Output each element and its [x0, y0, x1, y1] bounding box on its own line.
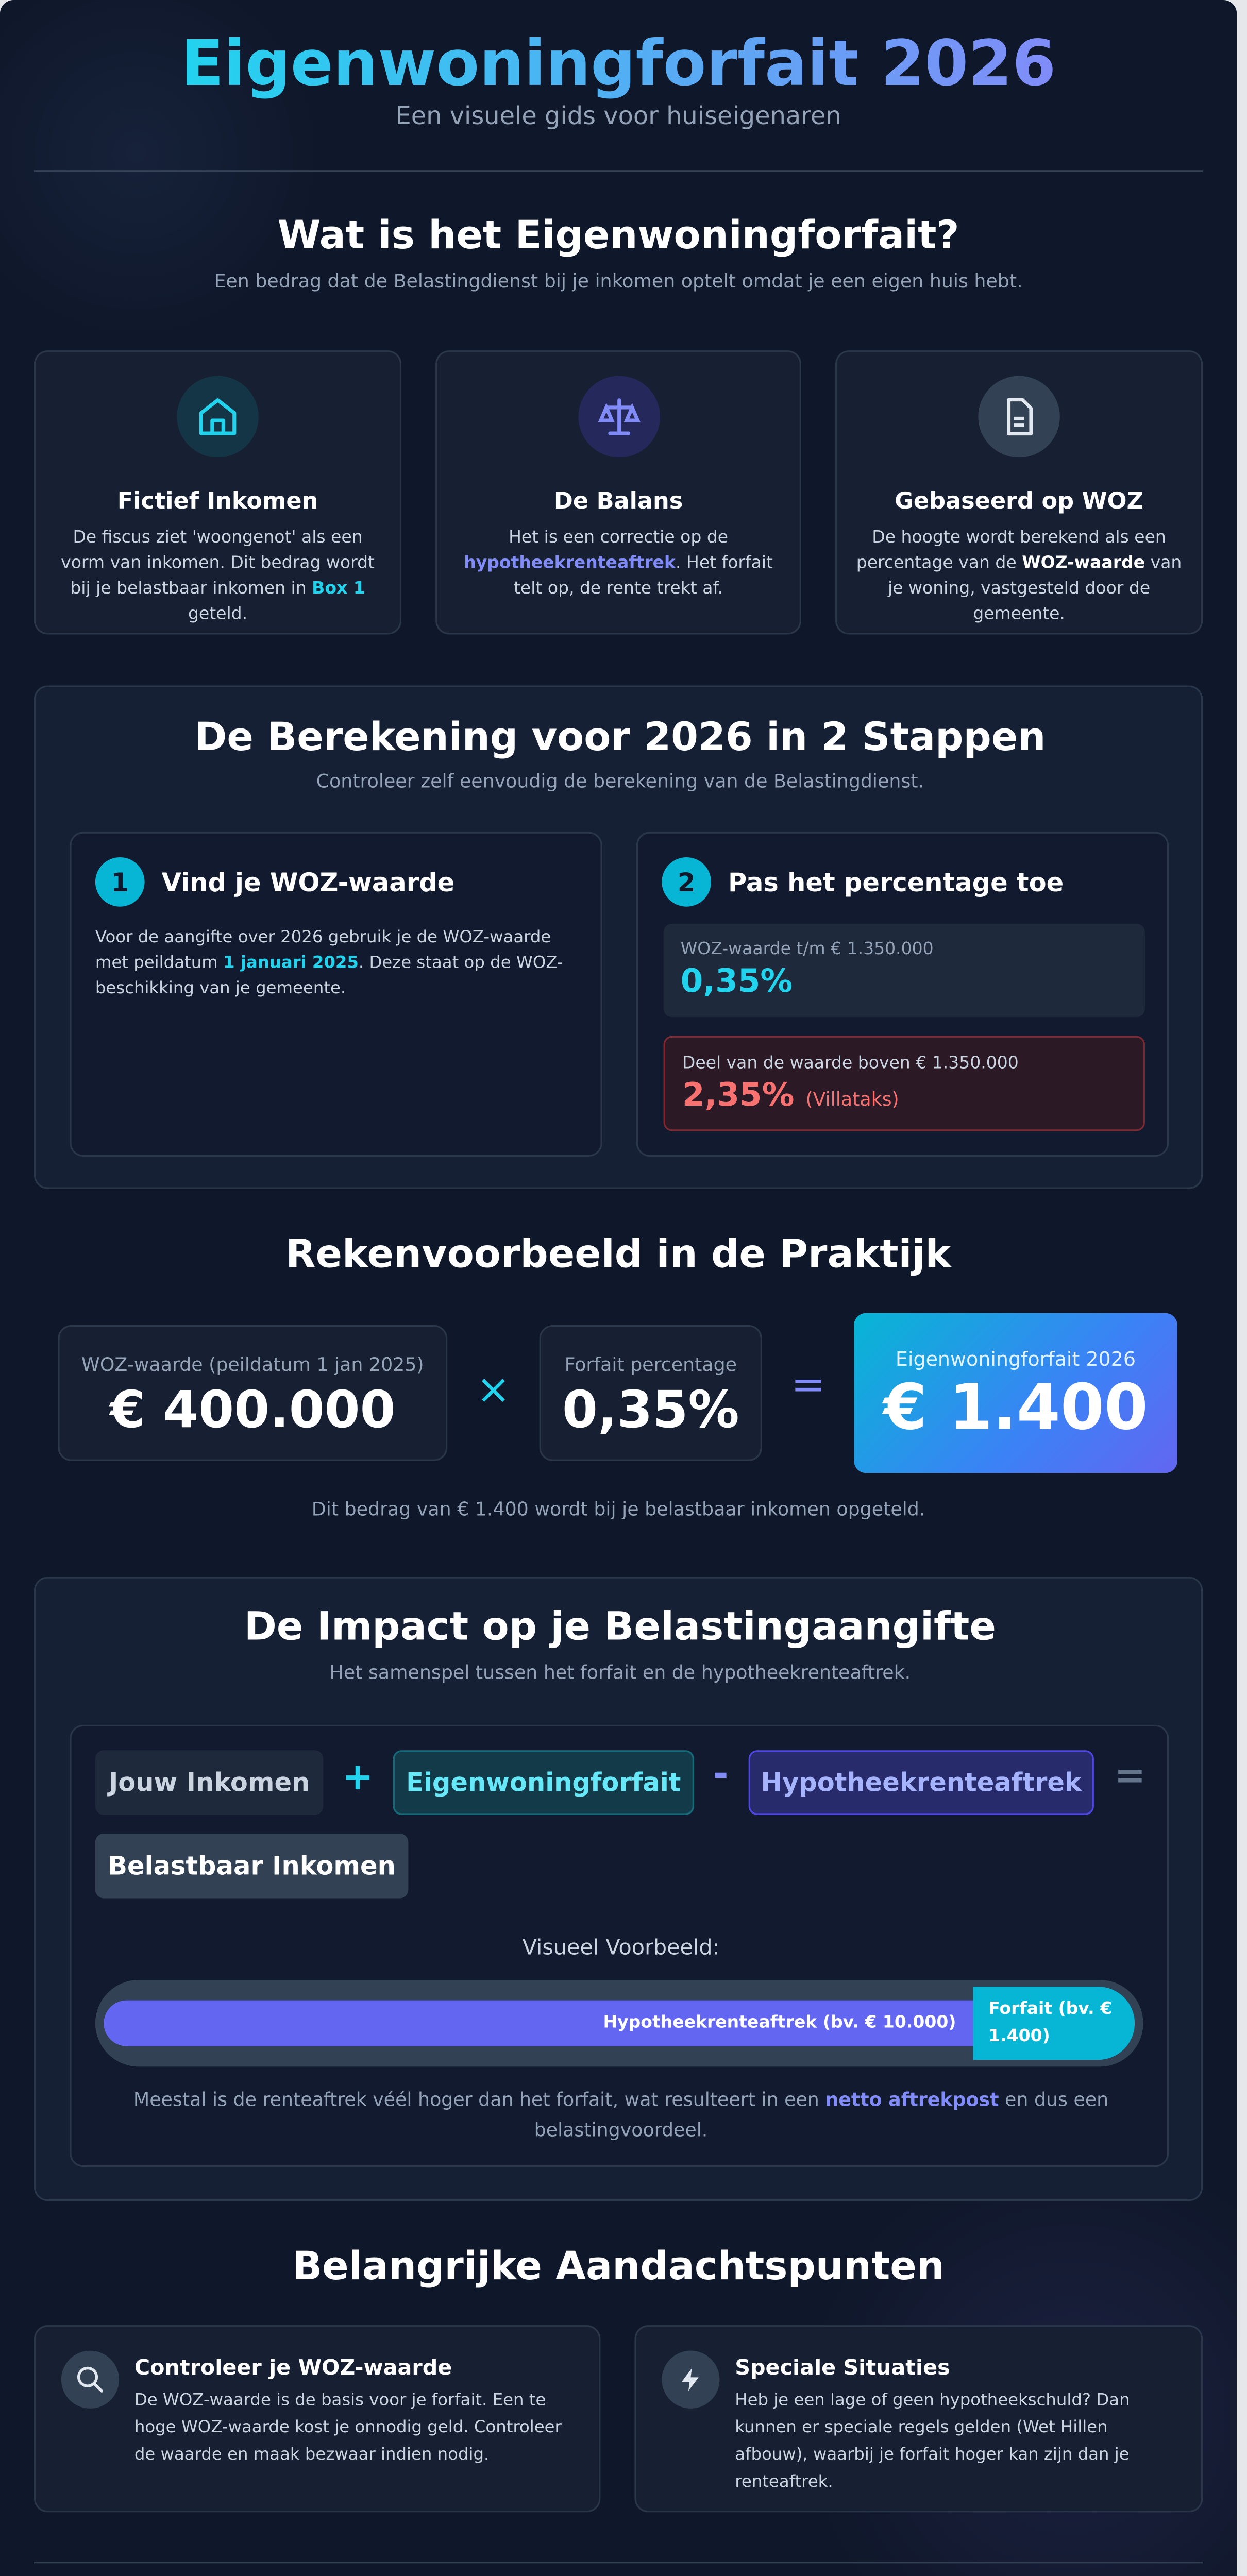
- step 1 header: [95, 857, 454, 907]
- pill: hypotheek: [749, 1750, 1094, 1815]
- result box: € 1.400: [883, 1371, 1148, 1444]
- bar: hypotheek: Hypotheekrenteaftrek (bv. € 10.000): [603, 2014, 956, 2032]
- heading: De Berekening voor 2026 in 2 Stappen: [194, 716, 1046, 760]
- result box: Eigenwoningforfait 2026: [896, 1347, 1136, 1371]
- step 2 header: 2: [678, 867, 695, 897]
- step 1 header: 1: [111, 867, 129, 897]
- tip: speciale situaties: Speciale Situaties: [735, 2354, 950, 2380]
- panel: fictief inkomen: [34, 350, 401, 634]
- caption: Dit bedrag van € 1.400 wordt bij je belastbaar inkomen opgeteld.: [312, 1499, 925, 1521]
- panel: woz: Gebaseerd op WOZ: [895, 488, 1143, 515]
- tip: woz: De WOZ-waarde is de basis voor je forfait. Een te hoge WOZ-waarde kost je onnodig geld. Controleer de waarde en maak bezwaar indien nodig.: [134, 2392, 562, 2465]
- bar: hypotheek: [104, 2001, 973, 2046]
- step 1 header: Vind je WOZ-waarde: [162, 867, 454, 897]
- panel: berekening: [34, 686, 1203, 1189]
- panel: woz: De hoogte wordt berekend als een percentage van de WOZ-waarde van je woning, vastgesteld door de gemeente.: [856, 529, 1182, 624]
- equals: =: [1114, 1755, 1145, 1798]
- box: percentage: 0,35%: [562, 1381, 739, 1440]
- tip: speciale situaties: Heb je een lage of geen hypotheekschuld? Dan kunnen er speciale regels gelden (Wet Hillen afbouw), waarbij je forfait hoger kan zijn dan je renteaftrek.: [735, 2392, 1130, 2492]
- box: percentage: [540, 1325, 762, 1461]
- step 1: [70, 832, 602, 1157]
- tip: speciale situaties: [634, 2325, 1203, 2512]
- pill: belastbaar: Belastbaar Inkomen: [108, 1851, 396, 1881]
- minus: -: [713, 1754, 729, 1796]
- icon: search: [61, 2351, 119, 2409]
- caption: Meestal is de renteaftrek véél hoger dan het forfait, wat resulteert in een netto aftrekpost en dus een belastingvoordeel.: [133, 2089, 1108, 2142]
- operator x: ×: [476, 1366, 511, 1414]
- plus: +: [342, 1757, 373, 1800]
- panel: de balans: Het is een correctie op de hypotheekrenteaftrek. Het forfait telt op, de rente trekt af.: [464, 529, 773, 599]
- subheading: Het samenspel tussen het forfait en de hypotheekrenteaftrek.: [330, 1662, 911, 1684]
- rate box normal: 0,35%: [681, 963, 793, 1000]
- rate box villataks: Deel van de waarde boven € 1.350.000: [682, 1055, 1019, 1073]
- rate box villataks: [664, 1036, 1145, 1131]
- box: woz: [58, 1325, 447, 1461]
- box: woz: € 400.000: [110, 1381, 396, 1440]
- rate box normal: WOZ-waarde t/m € 1.350.000: [681, 941, 934, 959]
- panel: woz: [835, 350, 1203, 634]
- subheading: Controleer zelf eenvoudig de berekening van de Belastingdienst.: [316, 771, 924, 792]
- formula box: [70, 1725, 1169, 2167]
- pill: jouw inkomen: Jouw Inkomen: [109, 1767, 310, 1798]
- step 1 text: Voor de aangifte over 2026 gebruik je de WOZ-waarde met peildatum 1 januari 2025. Deze staat op de WOZ-​beschikking van je gemeente.: [95, 929, 563, 998]
- rate box villataks: 2,35% (Villataks): [682, 1077, 899, 1114]
- bar chart: [95, 1980, 1143, 2066]
- subtitle: Een visuele gids voor huiseigenaren: [395, 104, 841, 131]
- step 2 header: [662, 857, 1064, 907]
- heading: wat is: Wat is het Eigenwoningforfait?: [278, 214, 959, 259]
- pill: jouw inkomen: [95, 1750, 323, 1815]
- panel: fictief inkomen: De fiscus ziet 'woongenot' als een vorm van inkomen. Dit bedrag wordt bij je belastbaar inkomen in Box 1 geteld.: [61, 529, 375, 624]
- panel: impact: [34, 1577, 1203, 2201]
- icon: document: [978, 376, 1060, 457]
- panel: de balans: De Balans: [554, 488, 683, 515]
- label visueel: Visueel Voorbeeld:: [523, 1934, 719, 1959]
- pill: forfait: [393, 1750, 694, 1815]
- panel: de balans: [435, 350, 801, 634]
- box: percentage: Forfait percentage: [565, 1354, 737, 1376]
- heading: De Impact op je Belastingaangifte: [244, 1606, 996, 1650]
- bar: forfait: Forfait (bv. €: [988, 2001, 1112, 2019]
- step 2: [636, 832, 1169, 1157]
- heading: aandachtspunten: Belangrijke Aandachtspunten: [292, 2245, 945, 2290]
- bar: forfait: 1.400): [988, 2027, 1050, 2046]
- step 2 header: Pas het percentage toe: [728, 867, 1064, 897]
- box: woz: WOZ-waarde (peildatum 1 jan 2025): [81, 1354, 424, 1376]
- title: Eigenwoningforfait 2026: [181, 27, 1056, 100]
- bar: forfait: [973, 1987, 1135, 2060]
- result box: [854, 1313, 1177, 1473]
- pill: forfait: Eigenwoningforfait: [406, 1767, 681, 1798]
- panel: fictief inkomen: Fictief Inkomen: [117, 488, 318, 515]
- pill: belastbaar: [95, 1834, 408, 1898]
- pill: hypotheek: Hypotheekrenteaftrek: [761, 1767, 1082, 1798]
- heading: rekenvoorbeeld: Rekenvoorbeeld in de Praktijk: [285, 1233, 951, 1277]
- icon: lightning: [662, 2351, 720, 2409]
- operator =: =: [791, 1361, 825, 1409]
- subheading: Een bedrag dat de Belastingdienst bij je inkomen optelt omdat je een eigen huis hebt.: [214, 270, 1023, 293]
- icon: scale: [578, 376, 659, 457]
- tip: woz: Controleer je WOZ-waarde: [134, 2354, 452, 2380]
- tip: woz: [34, 2325, 600, 2512]
- rate box normal: [664, 924, 1145, 1017]
- icon: house: [177, 376, 259, 457]
